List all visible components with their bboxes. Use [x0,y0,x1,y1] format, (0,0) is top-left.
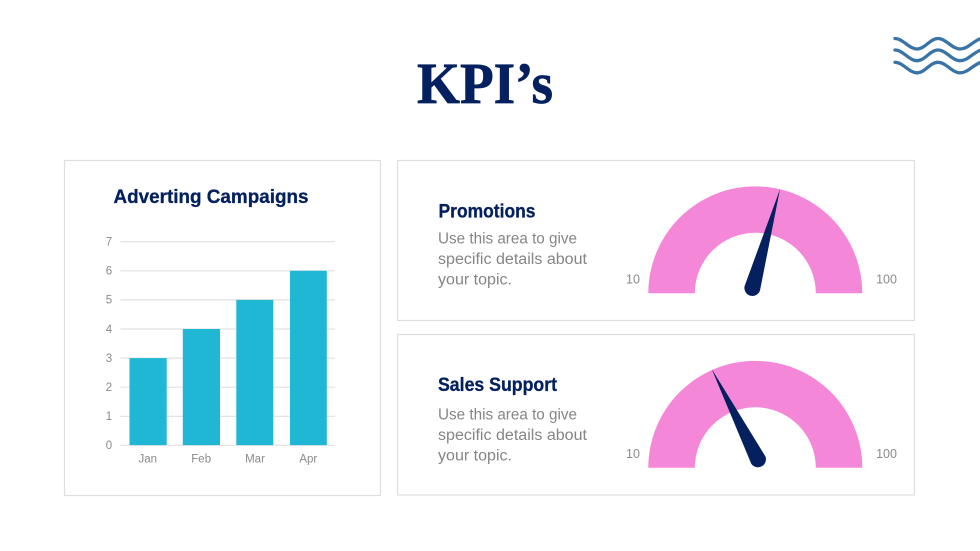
bar chart: 1 [106,411,112,423]
promotions text [438,230,588,288]
gauge: sales support [626,361,897,468]
bar chart: 3 [106,353,112,365]
panel: sales support [398,334,914,495]
bar chart: Apr [299,454,317,466]
bar chart: 7 [106,236,112,248]
panel: advertising campaigns chart [64,160,380,496]
sales support text [438,406,588,464]
bar chart: 0 [106,440,112,452]
gauge: promotions [626,186,897,296]
bar chart: 6 [106,266,112,278]
gauge: promotions: 100 [876,272,897,286]
sales support text: your topic. [438,448,512,464]
bar chart: Jan [139,454,157,466]
panel: promotions [398,160,914,320]
gauge: promotions: 10 [626,272,640,286]
bar chart: 2 [106,382,112,394]
promotions text: specific details about [438,251,588,268]
sales support text: specific details about [438,427,588,444]
gauge: sales support: 10 [626,447,640,461]
bar chart: 5 [106,295,112,307]
bar chart [106,236,335,466]
sales support heading: Sales Support [438,375,558,396]
bar chart: Mar [245,454,265,466]
chart heading: Adverting Campaigns [114,187,308,208]
sales support text: Use this area to give [438,406,577,424]
promotions text: your topic. [438,272,512,288]
icon: waves [895,38,980,73]
title: KPI’s [417,51,553,116]
bar chart: Feb [191,454,211,466]
promotions text: Use this area to give [438,230,577,248]
bar chart: 4 [106,324,113,336]
gauge: sales support: 100 [876,447,897,461]
promotions heading: Promotions [438,202,536,222]
